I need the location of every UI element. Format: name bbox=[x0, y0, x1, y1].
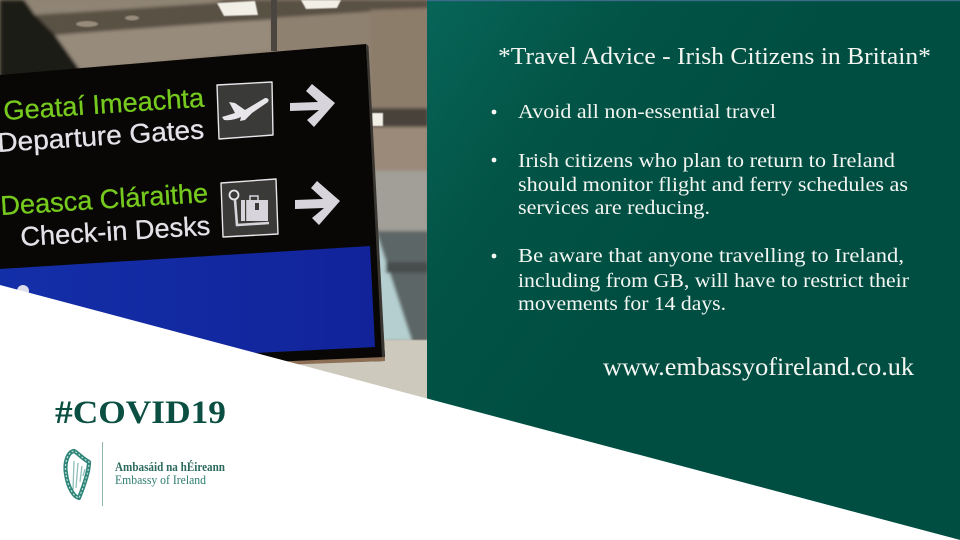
heading: travel advice: *Travel Advice - Irish Citizens in Britain* bbox=[498, 44, 931, 70]
icon: arrow bottom bbox=[295, 181, 340, 225]
icon: airplane bbox=[217, 82, 273, 139]
blue panel bbox=[0, 246, 375, 353]
icon: arrow top bbox=[290, 84, 335, 127]
website link: www.embassyofireland.co.uk bbox=[603, 354, 915, 381]
panel: white diagonal corner bbox=[0, 285, 960, 540]
bullet 2 bbox=[492, 150, 908, 219]
white dot on the blue panel bbox=[17, 285, 29, 297]
bullet 2: Irish citizens who plan to return to Ireland bbox=[518, 150, 895, 172]
sign text: English departures: Departure Gates bbox=[0, 114, 205, 158]
divider bbox=[102, 442, 103, 506]
logo text Irish: Ambasáid na hÉireann bbox=[115, 460, 225, 474]
sign board bbox=[0, 44, 385, 365]
heading: COVID19 hashtag: #COVID19 bbox=[55, 395, 226, 431]
logo text English: Embassy of Ireland bbox=[115, 473, 207, 487]
bullet 3: movements for 14 days. bbox=[518, 293, 726, 315]
panel: green advice panel bbox=[427, 0, 960, 540]
bullet 3 bbox=[492, 245, 909, 315]
bullet 1: Avoid all non-essential travel bbox=[518, 101, 776, 123]
airport ceiling background bbox=[0, 0, 428, 402]
sign text: English check-in: Check-in Desks bbox=[20, 211, 211, 252]
logo: Embassy of Ireland bbox=[65, 442, 225, 506]
bullet 2: services are reducing. bbox=[518, 197, 710, 219]
photo: airport departures sign bbox=[0, 0, 428, 402]
bullet 3: including from GB, will have to restrict their bbox=[518, 270, 909, 292]
bullet 3: Be aware that anyone travelling to Ireland, bbox=[518, 245, 904, 267]
icon: harp bbox=[65, 451, 89, 498]
sign text: Irish check-in: Deasca Cláraithe bbox=[0, 178, 209, 221]
bullet 2: should monitor flight and ferry schedules as bbox=[518, 174, 908, 196]
icon: luggage scale bbox=[221, 179, 278, 237]
sign text: Irish departures: Geataí Imeachta bbox=[2, 83, 206, 126]
